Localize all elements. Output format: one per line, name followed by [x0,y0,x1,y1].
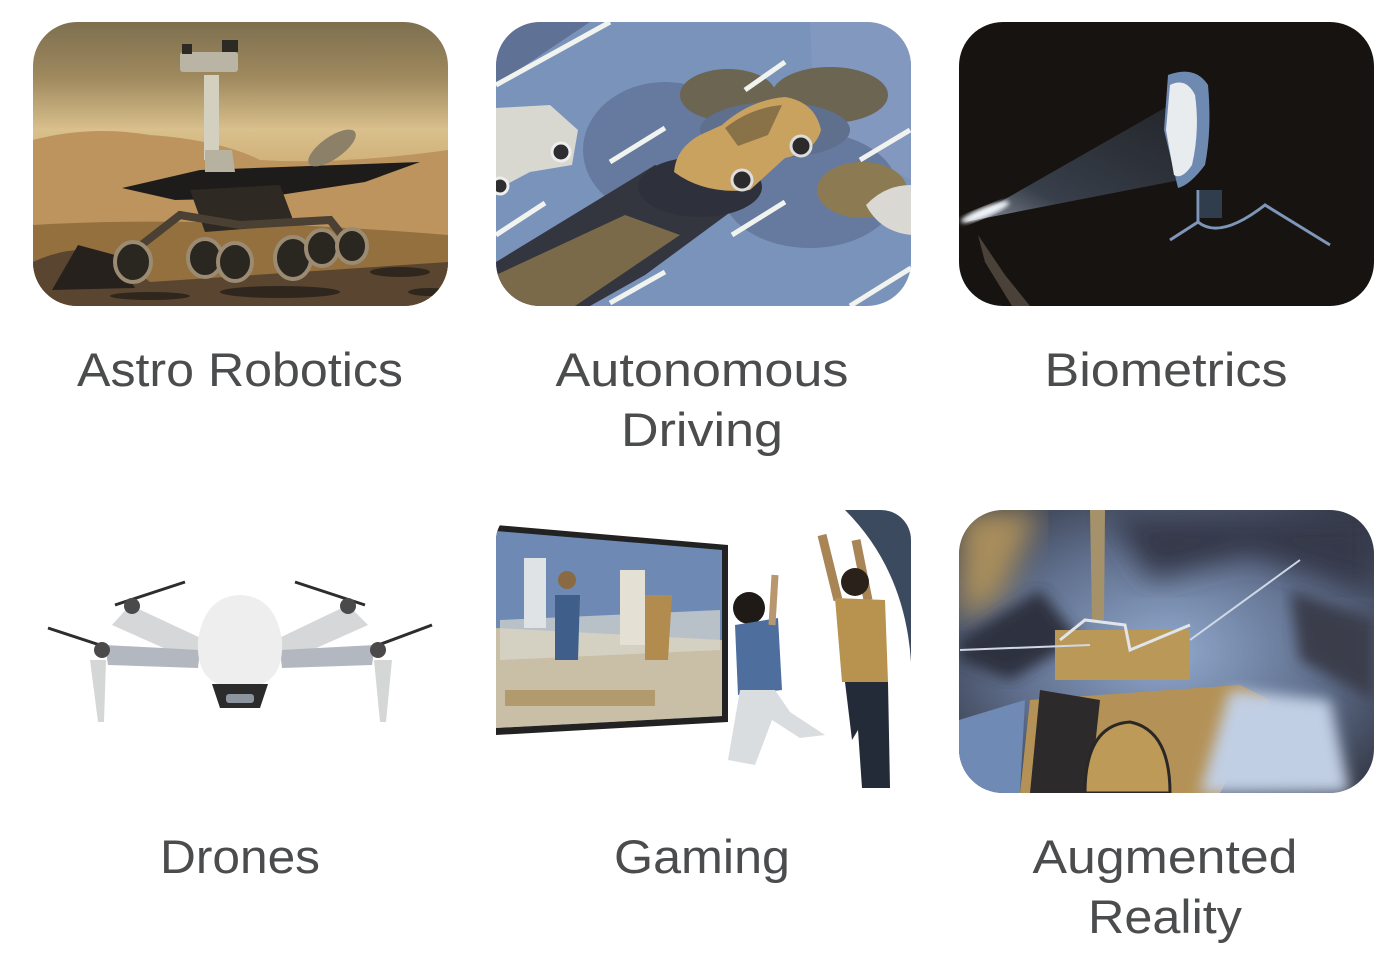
beam of light [965,105,1180,222]
label: biometrics: Biometrics [1044,343,1288,396]
panel: autonomous driving image [492,22,911,306]
panel: drone image [48,582,432,722]
label: augmented reality: Augmented [1032,830,1298,883]
sensor coverage [496,67,907,306]
icon: rover [115,40,420,282]
curved display edge [845,510,911,662]
panel: biometrics image [959,22,1374,306]
tv [496,525,728,735]
legs [90,660,106,722]
glowing cube [1055,620,1190,680]
label: gaming: Gaming [614,830,790,883]
icon: face [1164,72,1209,188]
label: astro robotics: Astro Robotics [77,343,403,396]
label: augmented reality: Reality [1088,890,1243,943]
label: autonomous driving: Driving [621,403,783,456]
label: autonomous driving: Autonomous [556,343,848,396]
road markings [496,22,911,306]
body outline [1170,190,1330,245]
icon: yellow car [674,97,821,191]
icon: white car left [492,105,578,194]
player right [822,535,890,788]
arms [105,605,375,668]
panel: gaming image [496,510,911,788]
rotors [48,582,432,650]
body [198,595,282,684]
panel: astro robotics image [33,22,452,306]
panel: augmented reality image [959,510,1374,793]
label: drones: Drones [160,830,320,883]
player left [728,575,825,765]
motors [94,598,386,658]
icon: phone and hand [978,235,1030,306]
icon: white car right [866,185,911,235]
